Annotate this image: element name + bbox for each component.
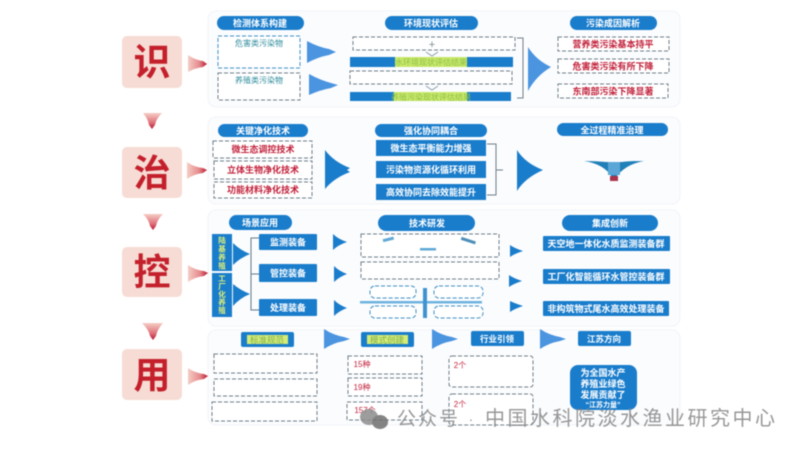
column: 集成创新: 集成创新 (592, 218, 628, 228)
column: 关键净化技术: 微生态调控技术 (231, 144, 295, 154)
column: 行业引领: 行业引领 (480, 334, 514, 344)
column: 强化协同耦合: 微生态平衡能力增强 (390, 142, 472, 154)
icon: chat bubbles (360, 409, 388, 429)
box: 用 (122, 349, 182, 400)
arrow: funnel to whole-process governance (517, 150, 543, 191)
column: 场景应用: 基 (218, 244, 226, 254)
column: 场景应用: 管控装备 (270, 268, 306, 278)
arrow: funnels to assessment (307, 41, 338, 95)
callout: contribution: “江苏力量” (586, 400, 620, 409)
column: 行业引领: 2个 (454, 400, 466, 409)
column: 场景应用: 处理装备 (270, 302, 306, 313)
column: 模式创建: 19种 (354, 382, 370, 392)
column: 江苏方向: 江苏方向 (587, 334, 621, 344)
column: 关键净化技术 (213, 124, 312, 198)
column: 污染成因解析: 东南部污染下降显著 (572, 86, 654, 96)
column: 技术研发 (360, 215, 499, 318)
column: 模式创建: 157个 (354, 406, 376, 415)
column: 环境现状评估: + (429, 39, 435, 51)
column: 场景应用: 殖 (218, 305, 226, 315)
column: 场景应用: 养 (218, 297, 226, 307)
column: 模式创建: 模式创建 (370, 335, 404, 345)
column: 污染成因解析: 危害类污染有所下降 (572, 60, 654, 72)
arrows: small funnels to integration (509, 245, 523, 312)
column: 全过程精准治理: 全过程精准治理 (580, 124, 644, 136)
column: 场景应用: 陆 (218, 235, 226, 245)
arrow: funnel to models (324, 329, 350, 349)
column: 集成创新: 非构筑物式尾水高效处理装备 (547, 303, 665, 314)
callout: contribution: 发展贡献了 (580, 389, 626, 400)
column: 关键净化技术: 关键净化技术 (236, 125, 290, 136)
column: 强化协同耦合 (375, 124, 503, 200)
column: 模式创建 (347, 332, 422, 420)
column: 强化协同耦合: 污染物资源化循环利用 (386, 164, 476, 175)
column: 环境现状评估: 水环境现状评估结果 (395, 57, 467, 67)
box: 识: 识 (134, 42, 170, 83)
column: 行业引领: 2个 (454, 361, 466, 370)
callout: contribution: 养殖业绿色 (580, 378, 626, 389)
arrow: funnel to Jiangsu direction (540, 329, 566, 349)
column: 关键净化技术: 立体生物净化技术 (227, 164, 299, 175)
box: 识 (122, 36, 182, 88)
column: 模式创建: 15种 (354, 359, 370, 369)
column: 标准规范 (212, 332, 317, 421)
column: 场景应用: 厂 (218, 282, 226, 291)
callout: contribution (570, 365, 637, 410)
column: 污染成因解析: 污染成因解析 (586, 18, 640, 28)
arrows: right pointing red funnels (187, 55, 208, 385)
panel: 控 row (208, 210, 680, 326)
watermark: 公众号 (397, 408, 458, 430)
column: 集成创新 (543, 215, 670, 316)
column: 集成创新: 工厂化智能循环水管控装备群 (547, 271, 665, 282)
watermark: · (469, 411, 473, 427)
box: 治: 治 (134, 153, 170, 194)
icon: winged governance emblem (584, 161, 644, 181)
arrow: funnel to synergy (325, 150, 350, 189)
column: 检测体系构建: 危害类污染物 (235, 38, 283, 48)
arrow: funnel to industry (432, 329, 458, 349)
column: 场景应用: 场景应用 (242, 217, 278, 228)
panel: 治 row (208, 117, 680, 204)
watermark (360, 407, 775, 430)
column: 行业引领 (449, 331, 533, 425)
column: 环境现状评估: 环境现状评估 (404, 18, 458, 28)
column: 检测体系构建 (217, 16, 304, 100)
panel: 用 row (208, 329, 680, 425)
column: 场景应用: 监测装备 (270, 236, 306, 248)
panel: 识 row (208, 11, 680, 107)
column: 江苏方向 (570, 331, 637, 410)
callout: contribution: 为全国水产 (580, 367, 626, 378)
arrows: small funnels to research (333, 234, 347, 316)
arrows: down pointing red funnels (142, 113, 163, 340)
column: 场景应用: 殖 (218, 260, 226, 270)
column: 污染成因解析: 营养类污染基本持平 (572, 38, 654, 50)
column: 检测体系构建: 养殖类污染物 (235, 75, 283, 85)
column: 标准规范: 标准规范 (250, 335, 284, 345)
column: 场景应用: 养 (218, 252, 226, 262)
column: 检测体系构建: 检测体系构建 (233, 18, 287, 28)
column: 集成创新: 天空地一体化水质监测装备群 (547, 238, 665, 249)
box: 用: 用 (134, 355, 170, 396)
column: 污染成因解析 (558, 16, 669, 98)
watermark: 中国水科院淡水渔业研究中心 (485, 407, 775, 430)
column: 环境现状评估 (350, 16, 523, 102)
box: 治 (122, 147, 182, 198)
column: 全过程精准治理 (557, 123, 668, 181)
column: 强化协同耦合: 强化协同耦合 (404, 125, 458, 136)
arrow: funnel to cause analysis (528, 47, 551, 91)
column: 环境现状评估: 养殖污染现状评估结果 (391, 92, 471, 102)
box: 控 (122, 247, 182, 297)
column: 场景应用: 工 (218, 274, 226, 283)
column: 关键净化技术: 功能材料净化技术 (227, 184, 299, 195)
column: 强化协同耦合: 高效协同去除效能提升 (386, 186, 476, 198)
column: 技术研发: 技术研发 (409, 218, 445, 228)
column: 场景应用: 化 (218, 289, 226, 299)
box: 控: 控 (134, 252, 170, 293)
column: 场景应用 (212, 215, 317, 317)
